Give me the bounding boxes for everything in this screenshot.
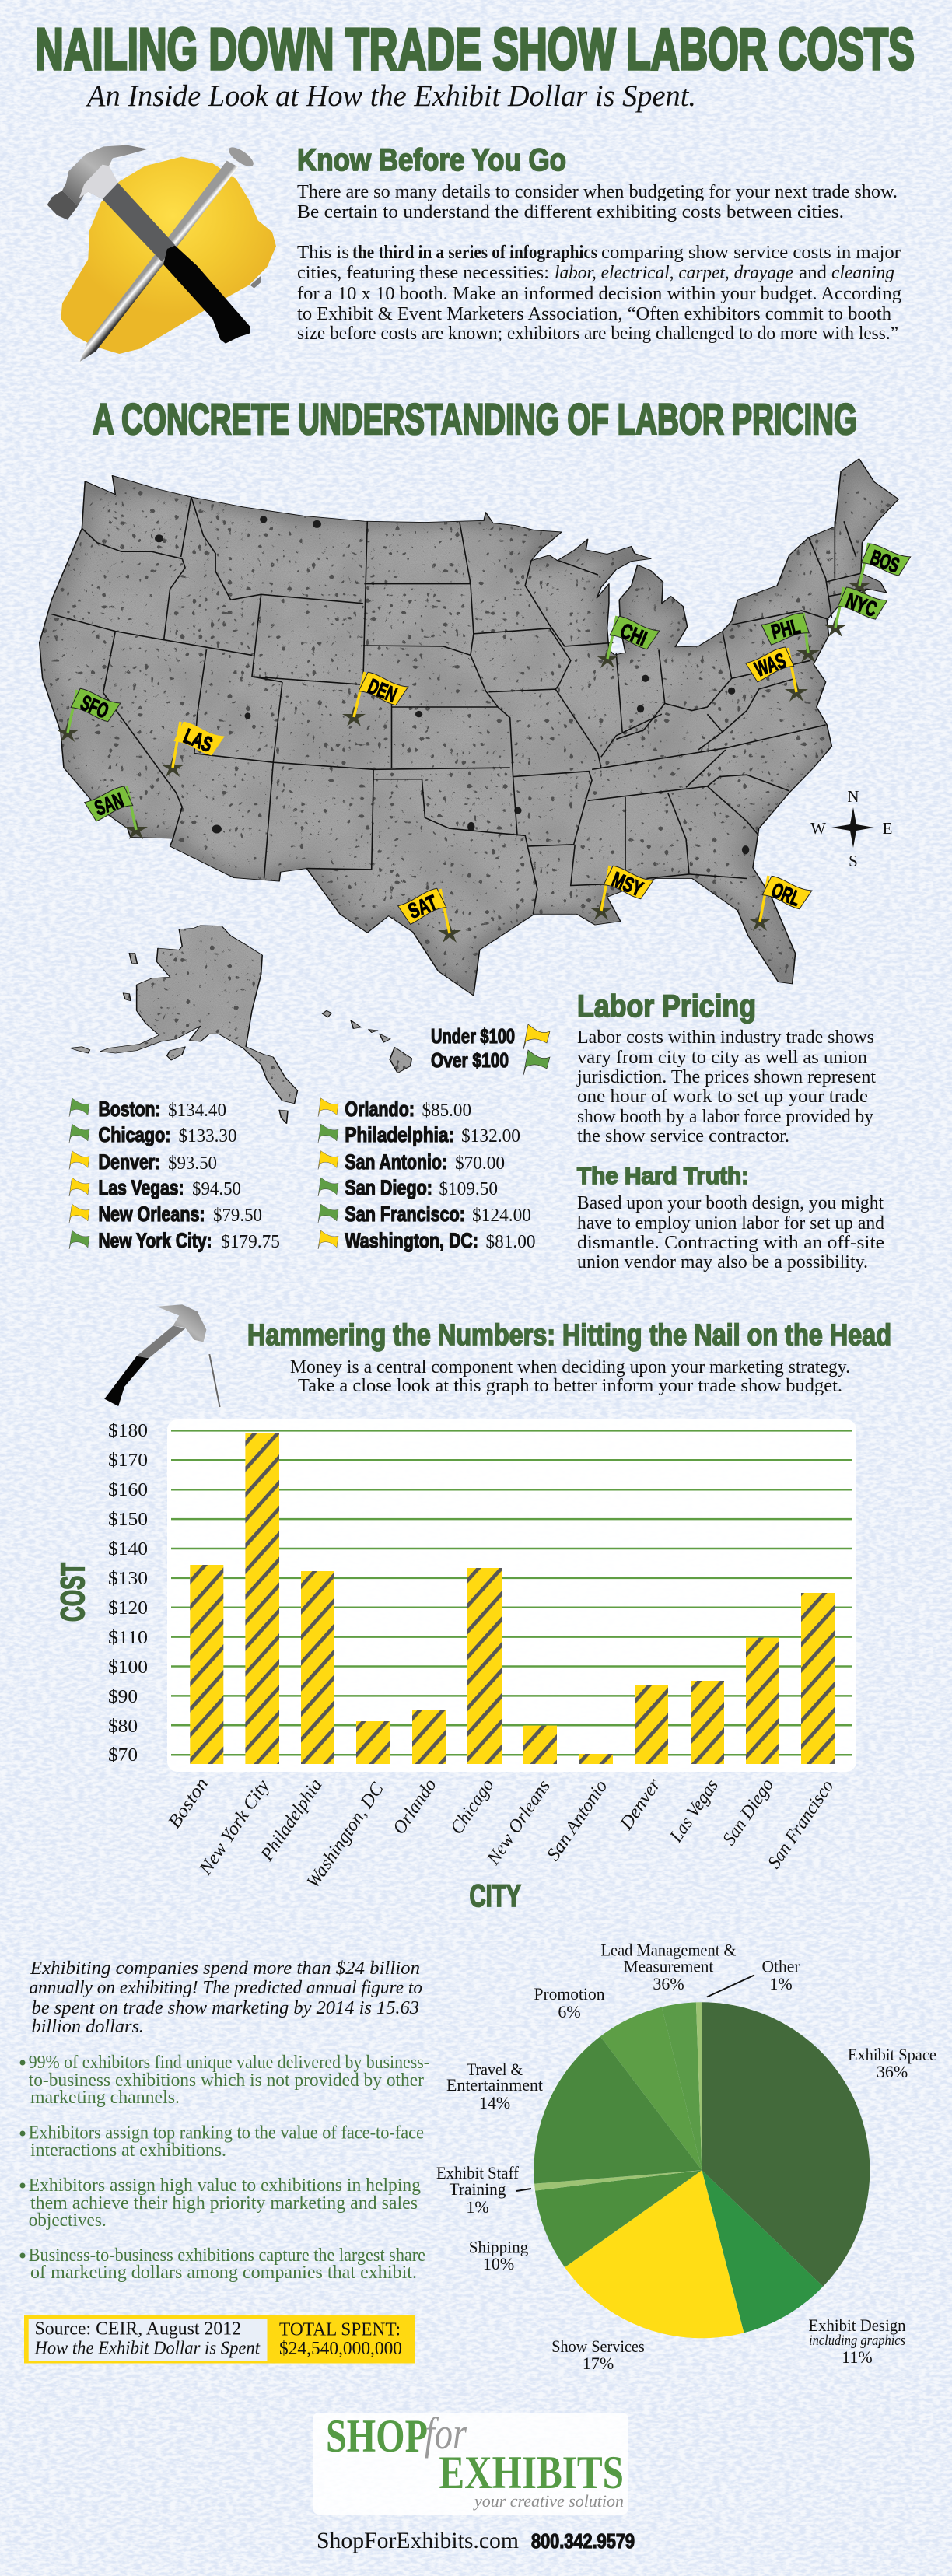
heading: the hard truth: The Hard Truth: xyxy=(577,1162,749,1189)
y axis labels: $90 xyxy=(108,1687,138,1707)
list: city labor prices, right column: San Antonio: xyxy=(345,1150,447,1174)
text block: labor pricing: one hour of work to set up your trade xyxy=(577,1087,868,1107)
list: city labor prices, left column: $134.40 xyxy=(168,1101,226,1121)
flag: Washington DC: WAS xyxy=(751,649,789,681)
pie labels: Travel & xyxy=(467,2060,523,2079)
bullet list: exhibition facts: of marketing dollars among companies that exhibit. xyxy=(30,2263,417,2283)
list: city labor prices, right column: $124.00 xyxy=(472,1206,531,1226)
flag: Las Vegas: LAS xyxy=(180,724,215,757)
flag: New York City: NYC xyxy=(843,589,880,621)
list: city labor prices, left column: New York City: xyxy=(98,1229,212,1252)
flag: Denver xyxy=(342,670,408,726)
flag: Washington DC xyxy=(745,646,808,702)
bullet list: exhibition facts: marketing channels. xyxy=(30,2088,180,2108)
flag: San Diego: SAN xyxy=(92,789,127,820)
y axis labels: $120 xyxy=(108,1598,148,1619)
flag: San Antonio xyxy=(397,887,461,943)
list: city labor prices, right column: $85.00 xyxy=(422,1101,471,1121)
text block: intro: cities, featuring these necessities: xyxy=(297,263,549,283)
text block: the hard truth xyxy=(577,1193,884,1272)
flag: New Orleans: MSY xyxy=(608,868,646,901)
pie labels: Exhibit Design xyxy=(809,2315,905,2335)
flag: San Antonio: SAT xyxy=(405,891,440,923)
text block: intro: the third in a series of infographics xyxy=(352,243,597,263)
callout: source and total spent: Source: CEIR, August 2012 xyxy=(34,2319,241,2340)
text block: intro: This is xyxy=(297,243,349,263)
logo: Shop for Exhibits: for xyxy=(425,2408,467,2459)
pie labels: 10% xyxy=(483,2254,514,2273)
pie labels: including graphics xyxy=(809,2333,905,2349)
text block: chart intro xyxy=(290,1357,850,1396)
pie labels xyxy=(436,1940,936,2373)
pie chart: how the exhibit dollar is spent xyxy=(516,1975,870,2338)
y axis labels: $130 xyxy=(108,1569,148,1589)
compass rose: W xyxy=(810,819,826,838)
list: city labor prices, right column: $70.00 xyxy=(455,1153,505,1174)
list: city labor prices, right column: $109.50 xyxy=(439,1179,498,1199)
icon: hard hat with crossed hammer and nail xyxy=(47,144,276,362)
y axis labels: $180 xyxy=(108,1421,148,1441)
text block: intro: cleaning xyxy=(831,263,894,283)
text block: labor pricing xyxy=(576,1027,876,1146)
y axis labels: $110 xyxy=(108,1628,148,1648)
list: city labor prices, left column: Las Vegas: xyxy=(98,1176,184,1199)
callout: source and total spent: $24,540,000,000 xyxy=(279,2339,402,2359)
text block: intro: and xyxy=(799,263,827,283)
flag: Denver: DEN xyxy=(365,674,400,707)
pie labels: Shipping xyxy=(469,2237,528,2257)
pie labels: Exhibit Space xyxy=(848,2045,936,2064)
text block: chart intro: Money is a central component when deciding upon your marketing strategy. xyxy=(290,1357,850,1377)
x axis labels: Chicago xyxy=(446,1775,499,1838)
text block: the hard truth: union vendor may also be a possibility. xyxy=(577,1252,868,1272)
bullet list: exhibition facts: objectives. xyxy=(29,2210,107,2231)
subtitle: An Inside Look at How the Exhibit Dollar is Spent. xyxy=(85,79,696,113)
bullet list: exhibition facts: them achieve their high priority marketing and sales xyxy=(30,2193,418,2214)
text block: intro: labor, electrical, carpet, drayage xyxy=(555,263,793,283)
y axis labels: $170 xyxy=(108,1451,148,1471)
x axis labels: Orlando xyxy=(389,1775,441,1838)
x axis labels: San Diego xyxy=(719,1775,778,1849)
x axis labels: Boston xyxy=(164,1774,212,1832)
icon: hammer and nail xyxy=(104,1304,220,1407)
text block: intro: to Exhibit & Event Marketers Association, “Often exhibitors commit to booth xyxy=(297,304,891,324)
flag: Orlando: ORL xyxy=(768,878,803,911)
bullet list: exhibition facts: interactions at exhibitions. xyxy=(30,2140,226,2161)
text block: spending intro xyxy=(30,1958,422,2037)
y axis labels: $160 xyxy=(108,1480,148,1500)
text block: intro xyxy=(297,182,901,344)
legend: flag colours xyxy=(431,1024,550,1075)
text block: the hard truth: Based upon your booth design, you might xyxy=(577,1193,884,1213)
pie labels: Promotion xyxy=(534,1984,605,2004)
text block: intro: size before costs are known; exhibitors are being challenged to do more with less.” xyxy=(297,324,898,344)
y axis labels: $150 xyxy=(108,1510,148,1530)
x axis labels: Washington, DC xyxy=(303,1779,388,1892)
pie labels: 17% xyxy=(583,2354,614,2373)
list: city labor prices, left column: Denver: xyxy=(98,1150,160,1174)
heading: labor pricing: Labor Pricing xyxy=(577,989,756,1024)
flag: Philadelphia xyxy=(761,612,820,663)
list: city labor prices, right column: $81.00 xyxy=(485,1232,535,1252)
list: city labor prices, left column: Chicago: xyxy=(98,1123,171,1146)
text block: intro: There are so many details to consider when budgeting for your next trade show. xyxy=(297,182,898,202)
logo: Shop for Exhibits: EXHIBITS xyxy=(439,2447,624,2498)
text block: the hard truth: dismantle. Contracting with an off-site xyxy=(577,1233,884,1253)
text block: intro: for a 10 x 10 booth. Make an informed decision within your budget. According xyxy=(297,284,901,304)
flag: Orlando xyxy=(748,874,812,931)
flag: New Orleans xyxy=(590,864,653,920)
pie labels: Training xyxy=(450,2179,506,2199)
x axis labels xyxy=(164,1774,838,1892)
y axis labels: $100 xyxy=(108,1657,148,1678)
compass rose: S xyxy=(849,852,858,870)
list: city labor prices, left column: $94.50 xyxy=(192,1179,241,1199)
pie labels: Show Services xyxy=(551,2336,645,2356)
text block: labor pricing: jurisdiction. The prices shown represent xyxy=(576,1067,876,1087)
x axis labels: Denver xyxy=(616,1775,665,1834)
logo: Shop for Exhibits: your creative solution xyxy=(473,2491,624,2511)
x axis labels: Las Vegas xyxy=(666,1776,723,1846)
pie labels: 36% xyxy=(877,2062,908,2081)
compass rose xyxy=(810,787,892,870)
pie labels: Exhibit Staff xyxy=(436,2163,520,2182)
bullet list: exhibition facts: Business-to-business exhibitions capture the largest share xyxy=(29,2245,425,2266)
footer: website and phone: 800.342.9579 xyxy=(531,2529,635,2553)
text block: labor pricing: the show service contractor. xyxy=(577,1126,789,1146)
text block: chart intro: Take a close look at this graph to better inform your trade show budget. xyxy=(298,1376,842,1396)
flag: San Diego xyxy=(84,785,148,839)
legend: flag colours: Under $100 xyxy=(431,1024,515,1048)
bars xyxy=(190,1433,835,1764)
list: city labor prices, right column: Washington, DC: xyxy=(345,1229,478,1252)
list: city labor prices, left column: $179.75 xyxy=(221,1232,280,1252)
axis title: cost: COST xyxy=(54,1563,92,1622)
list: city labor prices, right column: San Diego: xyxy=(345,1176,432,1199)
x axis labels: San Francisco xyxy=(764,1776,838,1872)
bullet list: exhibition facts: 99% of exhibitors find unique value delivered by business- xyxy=(29,2053,429,2073)
flag: Boston: BOS xyxy=(867,546,902,577)
flag: Boston xyxy=(848,541,911,595)
list: city labor prices, right column xyxy=(318,1097,535,1252)
flag: Chicago: CHI xyxy=(617,619,650,650)
flag: Chicago xyxy=(596,614,660,668)
flag: Philadelphia: PHL xyxy=(769,614,803,644)
list: city labor prices, right column: $132.00 xyxy=(461,1126,520,1146)
list: city labor prices, left column: $79.50 xyxy=(213,1206,262,1226)
callout: source and total spent xyxy=(24,2315,415,2363)
footer: website and phone xyxy=(317,2528,635,2553)
pie labels: Entertainment xyxy=(446,2075,543,2095)
logo: Shop for Exhibits xyxy=(313,2408,628,2515)
y axis labels: $80 xyxy=(108,1717,138,1737)
flag: Las Vegas xyxy=(161,720,224,777)
list: city labor prices, left column xyxy=(69,1097,280,1252)
text block: labor pricing: vary from city to city as well as union xyxy=(577,1048,867,1068)
pie labels: 14% xyxy=(479,2093,510,2112)
compass rose: N xyxy=(847,787,859,806)
pie labels: 1% xyxy=(466,2197,489,2217)
bullet list: exhibition facts: Exhibitors assign top ranking to the value of face-to-face xyxy=(29,2123,424,2144)
text block: intro: Be certain to understand the different exhibiting costs between cities. xyxy=(297,202,844,222)
callout: source and total spent: TOTAL SPENT: xyxy=(279,2320,401,2340)
y axis labels xyxy=(108,1421,148,1766)
list: city labor prices, left column: Boston: xyxy=(98,1097,160,1121)
bar chart: labor cost by city xyxy=(108,1419,856,1892)
x axis labels: Philadelphia xyxy=(257,1776,327,1865)
flag: New York City xyxy=(824,585,887,637)
pie labels: Other xyxy=(762,1957,800,1976)
text block: spending intro: Exhibiting companies spend more than $24 billion xyxy=(30,1958,420,1979)
pie labels: 1% xyxy=(769,1974,793,1993)
x axis labels: New York City xyxy=(195,1776,274,1879)
pie labels: 36% xyxy=(653,1974,684,1993)
flag: San Francisco xyxy=(56,687,121,742)
text block: labor pricing: show booth by a labor force provided by xyxy=(577,1107,873,1127)
footer: website and phone: ShopForExhibits.com xyxy=(317,2528,519,2553)
heading: know before you go: Know Before You Go xyxy=(297,143,566,177)
legend: flag colours: Over $100 xyxy=(431,1048,509,1072)
x axis labels: New Orleans xyxy=(483,1776,555,1869)
list: city labor prices, left column: New Orleans: xyxy=(98,1202,205,1226)
bullet list: exhibition facts: Exhibitors assign high value to exhibitions in helping xyxy=(29,2175,421,2196)
text block: intro: comparing show service costs in major xyxy=(601,243,901,263)
y axis labels: $140 xyxy=(108,1539,148,1559)
pie labels: 6% xyxy=(558,2002,581,2021)
list: city labor prices, left column: $133.30 xyxy=(179,1126,236,1146)
text block: the hard truth: have to employ union labor for set up and xyxy=(577,1213,884,1234)
list: city labor prices, left column: $93.50 xyxy=(168,1153,217,1174)
text block: spending intro: annually on exhibiting! The predicted annual figure to xyxy=(30,1978,422,1998)
text block: spending intro: be spent on trade show marketing by 2014 is 15.63 xyxy=(32,1998,419,2018)
bullet list: exhibition facts: to-business exhibitions which is not provided by other xyxy=(29,2070,424,2091)
bullet list: exhibition facts xyxy=(20,2053,429,2283)
flag: San Francisco: SFO xyxy=(77,691,112,723)
list: city labor prices, right column: Philadelphia: xyxy=(345,1123,454,1146)
logo: Shop for Exhibits: SHOP xyxy=(326,2410,428,2462)
callout: source and total spent: How the Exhibit Dollar is Spent xyxy=(34,2338,261,2358)
map: United States, Alaska and Hawaii xyxy=(39,458,899,1124)
list: city labor prices, right column: San Francisco: xyxy=(345,1202,465,1226)
compass rose: E xyxy=(883,819,892,838)
axis title: city: CITY xyxy=(470,1879,521,1913)
y axis labels: $70 xyxy=(108,1745,138,1766)
text block: spending intro: billion dollars. xyxy=(32,2017,144,2037)
pie labels: 11% xyxy=(842,2347,873,2367)
text block: labor pricing: Labor costs within industry trade shows xyxy=(577,1027,874,1048)
list: city labor prices, right column: Orlando: xyxy=(345,1097,415,1121)
pie labels: Lead Management & xyxy=(600,1940,736,1960)
x axis labels: San Antonio xyxy=(543,1776,612,1864)
pie labels: Measurement xyxy=(624,1957,713,1976)
